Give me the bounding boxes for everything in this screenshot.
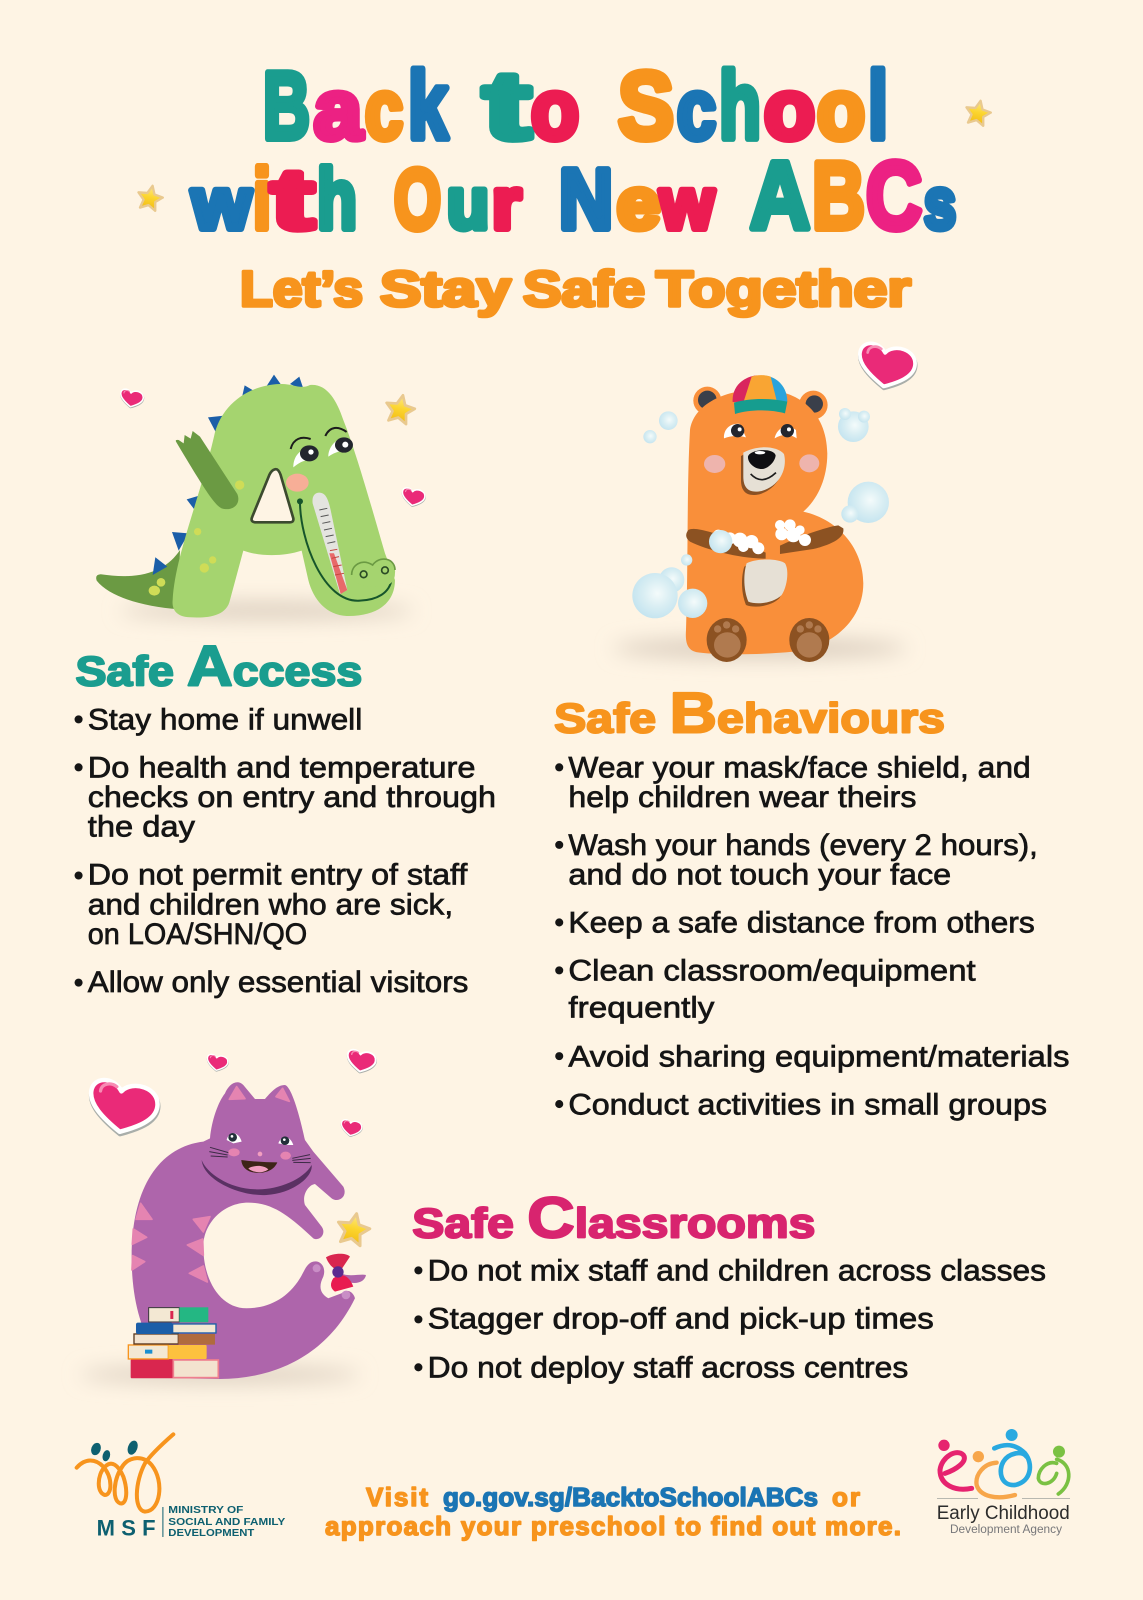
logo: MSF: SOCIAL AND FAMILY xyxy=(168,1516,285,1528)
list: safe access: the day xyxy=(88,811,195,844)
title line 1: B xyxy=(263,52,310,160)
title line 1: o xyxy=(764,62,815,156)
list: safe classrooms: Do not mix staff and children across classes xyxy=(428,1255,1046,1288)
logo: MSF: MINISTRY OF xyxy=(168,1504,244,1516)
list: safe behaviours: frequently xyxy=(568,991,715,1024)
title line 2: B xyxy=(812,142,865,250)
title line 2: O xyxy=(394,152,441,248)
logo: ECDA: Early Childhood xyxy=(937,1503,1070,1524)
title line 1: h xyxy=(719,52,761,160)
list: safe behaviours: Conduct activities in small groups xyxy=(568,1088,1047,1121)
panel: safe classrooms xyxy=(412,1187,1046,1385)
title stars xyxy=(135,98,993,212)
title line 1: a xyxy=(314,62,363,156)
list: safe behaviours xyxy=(556,752,1069,1121)
list: safe access: Do health and temperature xyxy=(88,752,476,785)
list: safe access xyxy=(75,704,496,999)
title line 2: w xyxy=(191,164,252,244)
title line 1: S xyxy=(618,52,674,160)
list: safe behaviours: Avoid sharing equipment/materials xyxy=(568,1040,1069,1073)
panel: safe access xyxy=(75,635,496,999)
title line 2 xyxy=(191,142,956,250)
footer message: go.gov.sg/BacktoSchoolABCs xyxy=(443,1482,818,1512)
title line 2: e xyxy=(617,164,660,244)
subtitle: Stay xyxy=(380,261,511,317)
illustration: cat letter C xyxy=(80,1049,377,1383)
subtitle: Let’s xyxy=(240,261,363,317)
list: safe behaviours: help children wear theirs xyxy=(568,781,916,814)
title line 1 xyxy=(263,52,888,160)
title xyxy=(135,52,993,250)
list: safe behaviours: Clean classroom/equipment xyxy=(568,955,976,988)
subtitle: Together xyxy=(656,261,911,317)
illustration: bear letter B xyxy=(613,342,918,662)
title line 1: l xyxy=(868,52,888,160)
title line 1: c xyxy=(677,62,716,156)
panel: safe behaviours xyxy=(554,682,1069,1121)
title line 2: w xyxy=(659,164,715,244)
subtitle: Safe xyxy=(523,261,645,317)
logo: MSF xyxy=(77,1434,285,1541)
list: safe access: on LOA/SHN/QO xyxy=(88,918,307,951)
heading: safe access: Safe Access xyxy=(76,635,362,699)
heading: safe classrooms: Safe Classrooms xyxy=(412,1187,815,1251)
title line 1: t xyxy=(483,52,531,160)
list: safe access: Stay home if unwell xyxy=(88,704,362,737)
list: safe access: Do not permit entry of staff xyxy=(88,859,468,892)
list: safe access: and children who are sick, xyxy=(88,888,453,921)
title line 2: N xyxy=(559,152,613,248)
title line 2: h xyxy=(317,152,357,248)
logo: ECDA xyxy=(937,1429,1070,1536)
list: safe access: Allow only essential visitors xyxy=(88,966,468,999)
title line 1: o xyxy=(531,62,579,156)
title line 1: k xyxy=(408,52,448,160)
logo: ECDA: Development Agency xyxy=(950,1524,1062,1536)
list: safe classrooms xyxy=(415,1255,1046,1385)
title line 2: u xyxy=(447,164,489,244)
list: safe access: checks on entry and through xyxy=(88,781,496,814)
logo: MSF: MSF xyxy=(97,1516,156,1541)
title line 2: r xyxy=(492,164,521,244)
illustration: crocodile letter A xyxy=(96,375,426,619)
title line 1: o xyxy=(817,62,865,156)
footer message xyxy=(325,1482,901,1541)
title line 1: c xyxy=(365,62,403,156)
title line 2: s xyxy=(924,164,956,244)
footer message: Visit xyxy=(366,1482,428,1512)
list: safe behaviours: and do not touch your face xyxy=(568,859,951,892)
title line 2: i xyxy=(253,152,271,248)
list: safe behaviours: Keep a safe distance from others xyxy=(568,907,1035,940)
icon: MSF people mark xyxy=(77,1434,173,1512)
list: safe classrooms: Do not deploy staff across centres xyxy=(428,1352,908,1385)
text sections, laid out in a 1120-wide coordinate grid xyxy=(75,635,1069,1385)
title line 2: C xyxy=(866,142,922,250)
footer message: or xyxy=(832,1482,860,1512)
list: safe behaviours: Wash your hands (every 2 hours), xyxy=(568,829,1038,862)
logo: MSF: DEVELOPMENT xyxy=(168,1527,255,1539)
heading: safe behaviours: Safe Behaviours xyxy=(554,682,945,746)
title line 2: t xyxy=(271,152,314,248)
list: safe behaviours: Wear your mask/face shield, and xyxy=(568,752,1031,785)
footer message: approach your preschool to find out more. xyxy=(325,1511,901,1541)
list: safe classrooms: Stagger drop-off and pick-up times xyxy=(428,1303,934,1336)
title line 2: A xyxy=(750,142,810,250)
icon: ECDA figures xyxy=(938,1429,1069,1497)
